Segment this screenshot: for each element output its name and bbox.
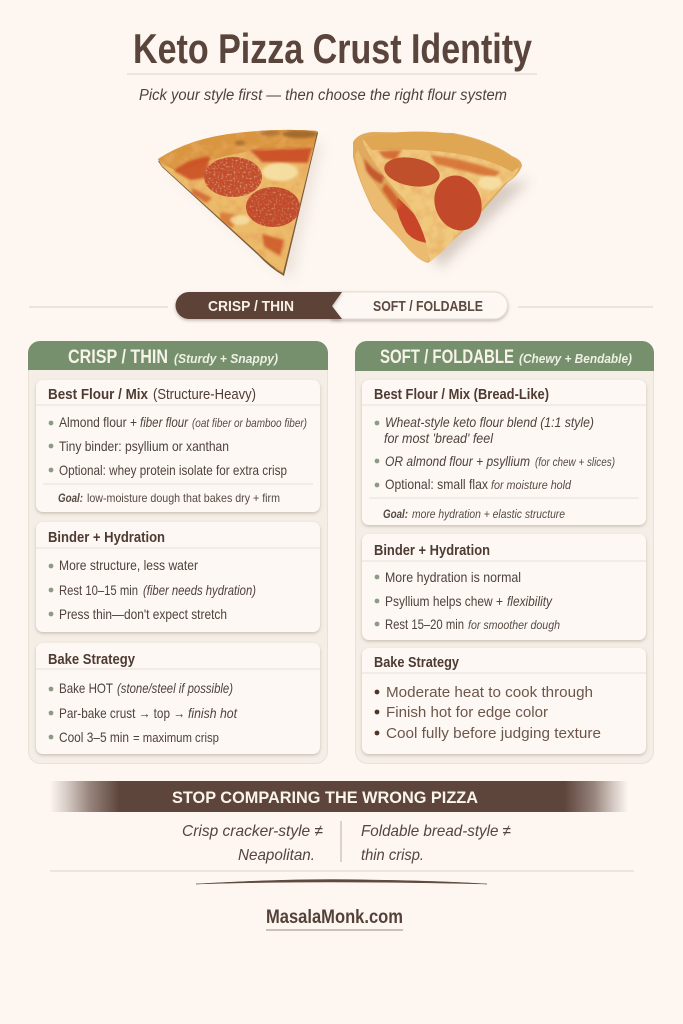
comparison: crisp cracker-style — [182, 823, 323, 864]
card: bake strategy: Bake HOT — [59, 680, 113, 696]
card: binder hydration: Rest 10–15 min — [59, 582, 138, 598]
card: best flour mix: more hydration + elastic structure — [412, 507, 565, 521]
card: best flour mix: Best Flour / Mix — [48, 386, 149, 403]
card: best flour mix: for moisture hold — [491, 478, 571, 492]
card: bake strategy — [362, 648, 646, 754]
card: binder hydration: More hydration is normal — [385, 569, 521, 585]
card: best flour mix: Wheat-style keto flour blend (1:1 style) — [385, 414, 594, 430]
card: binder hydration — [362, 534, 646, 640]
title: Keto Pizza Crust Identity — [133, 25, 533, 72]
image: soft foldable pizza slice — [353, 128, 530, 268]
card: binder hydration: Binder + Hydration — [48, 529, 165, 546]
panel header: crisp thin: CRISP / THIN — [68, 347, 168, 368]
toggle option: soft foldable: SOFT / FOLDABLE — [373, 298, 483, 315]
banner: stop comparing: STOP COMPARING THE WRONG PIZZA — [172, 788, 478, 807]
card: bake strategy: Cool 3–5 min — [59, 729, 129, 745]
card: best flour mix: (oat fiber or bamboo fiber) — [192, 416, 307, 430]
card: bake strategy — [36, 643, 320, 754]
card: best flour mix: Best Flour / Mix (Bread-Like) — [374, 386, 549, 403]
toggle option: soft foldable — [332, 292, 508, 319]
card: bake strategy: Moderate heat to cook through — [386, 684, 593, 701]
card: bake strategy: Bake Strategy — [374, 654, 460, 671]
panel header: soft foldable: SOFT / FOLDABLE — [380, 347, 514, 368]
comparison: crisp cracker-style: Crisp cracker-style ≠ — [182, 823, 323, 840]
card: best flour mix: Goal: — [383, 507, 408, 521]
card: best flour mix: fiber flour — [140, 414, 189, 430]
card: best flour mix: Almond flour + — [59, 414, 137, 430]
card: best flour mix — [362, 380, 646, 525]
toggle option: crisp thin: CRISP / THIN — [208, 298, 294, 315]
card: binder hydration: Rest 15–20 min — [385, 616, 464, 632]
card: bake strategy: (stone/steel if possible) — [117, 680, 233, 696]
comparison: foldable bread-style — [361, 823, 511, 864]
comparison: crisp cracker-style: Neapolitan. — [238, 847, 315, 864]
image: crisp thin pizza slice — [158, 130, 322, 276]
comparison: foldable bread-style: thin crisp. — [361, 847, 424, 864]
card: binder hydration: More structure, less water — [59, 557, 198, 573]
card: best flour mix: (Structure-Heavy) — [153, 386, 256, 403]
card: best flour mix: Tiny binder: psyllium or xanthan — [59, 438, 229, 454]
card: bake strategy: Par-bake crust → top → — [59, 705, 185, 721]
card: binder hydration: Psyllium helps chew + — [385, 593, 503, 609]
card: best flour mix: low-moisture dough that bakes dry + firm — [87, 491, 280, 505]
card: bake strategy: finish hot — [188, 705, 238, 721]
toggle option: crisp thin — [176, 292, 342, 319]
card: best flour mix: (for chew + slices) — [535, 455, 615, 469]
card: best flour mix: Goal: — [58, 491, 83, 505]
panel header: crisp thin: (Sturdy + Snappy) — [174, 351, 278, 366]
comparison: foldable bread-style: Foldable bread-style ≠ — [361, 823, 511, 840]
style toggle pill — [176, 292, 508, 319]
banner: stop comparing — [50, 781, 628, 812]
footer brand: MasalaMonk.com — [266, 907, 403, 928]
panel: soft foldable — [355, 341, 654, 764]
card: binder hydration — [36, 522, 320, 632]
panel header: soft foldable: (Chewy + Bendable) — [519, 351, 632, 366]
divider lines beside toggle — [29, 306, 653, 308]
card: bake strategy: Finish hot for edge color — [386, 704, 548, 721]
panel header: crisp thin — [28, 341, 328, 370]
card: best flour mix — [36, 380, 320, 512]
subtitle: Pick your style first — then choose the right flour system — [139, 87, 507, 104]
panel: crisp thin — [28, 341, 328, 764]
card: bake strategy: Bake Strategy — [48, 651, 136, 668]
card: best flour mix: Optional: small flax — [385, 476, 488, 492]
card: binder hydration: flexibility — [507, 593, 553, 609]
card: best flour mix: for most 'bread' feel — [384, 430, 494, 446]
card: binder hydration: Binder + Hydration — [374, 542, 490, 559]
card: bake strategy: Cool fully before judging texture — [386, 725, 601, 742]
card: binder hydration: (fiber needs hydration) — [143, 582, 256, 598]
card: binder hydration: for smoother dough — [468, 618, 560, 632]
panel header: soft foldable — [355, 341, 654, 371]
card: binder hydration: Press thin—don't expect stretch — [59, 606, 227, 622]
card: best flour mix: Optional: whey protein isolate for extra crisp — [59, 462, 287, 478]
card: best flour mix: OR almond flour + psyllium — [385, 453, 530, 469]
card: bake strategy: = maximum crisp — [133, 730, 219, 745]
